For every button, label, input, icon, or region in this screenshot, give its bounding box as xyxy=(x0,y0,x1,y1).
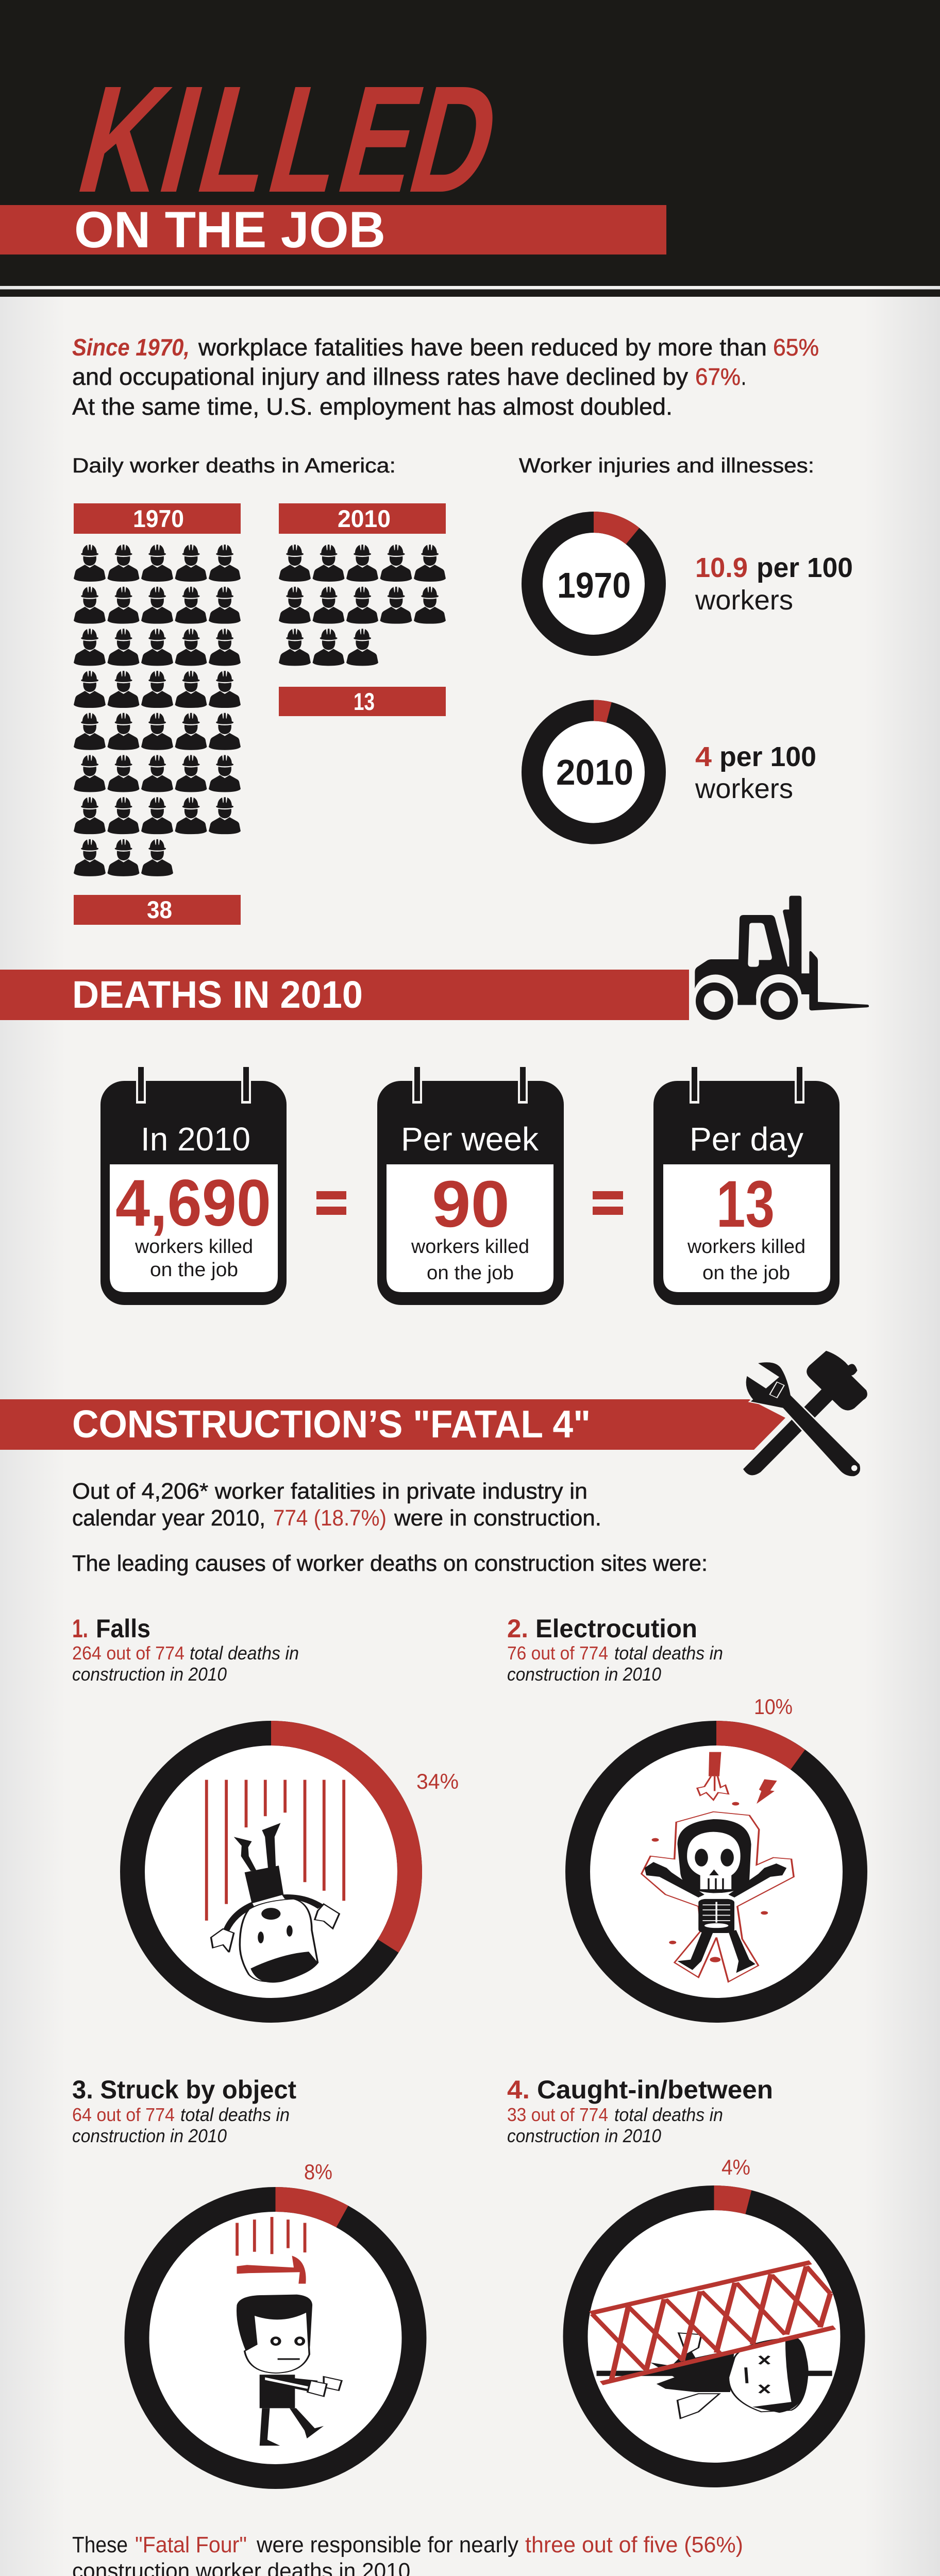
section banner: construction's fatal 4 xyxy=(0,1399,785,1450)
percentage: 34% xyxy=(416,1769,459,1793)
intro paragraph: . xyxy=(741,363,746,390)
percentage: 8% xyxy=(304,2160,332,2184)
subtext xyxy=(507,1642,723,1685)
heading: daily worker deaths: Daily worker deaths in America: xyxy=(72,454,396,477)
donut: 1970 injuries: 1970 xyxy=(557,565,631,605)
subtext: total deaths in xyxy=(614,2104,723,2125)
heading: Falls xyxy=(96,1614,150,1643)
paragraph: fatal four share: These xyxy=(72,2532,128,2557)
intro paragraph: Since 1970, xyxy=(72,334,190,361)
panel: falls xyxy=(72,1614,459,2010)
heading: 1. xyxy=(72,1614,88,1643)
illustration: worker under ladder xyxy=(591,2262,834,2418)
donut: 34% xyxy=(132,1721,422,2010)
heading: 2. xyxy=(507,1614,528,1643)
paragraph: fatal four share xyxy=(72,2532,743,2576)
illustration: electrocuted skeleton xyxy=(642,1752,794,1982)
subtext: 76 out of 774 xyxy=(507,1642,608,1664)
icon: forklift xyxy=(695,896,869,1016)
intro paragraph: 65% xyxy=(773,334,819,361)
calendar: per day: Per day xyxy=(690,1121,803,1158)
calendar: in 2010: 4,690 xyxy=(115,1166,271,1240)
paragraph: construction share: were in construction. xyxy=(394,1505,601,1531)
label bar: 2010 xyxy=(279,503,446,534)
donut: 1970 injuries xyxy=(532,512,656,645)
illustration: falling worker xyxy=(205,1780,345,1982)
total bar: 38 xyxy=(74,895,241,925)
donut: 2010 injuries xyxy=(532,700,656,834)
stat: 4 per 100: workers xyxy=(695,773,793,804)
subtext: construction in 2010 xyxy=(72,2125,227,2146)
donut: 4% xyxy=(575,2185,852,2475)
label bar: 2010: 2010 xyxy=(338,505,391,532)
subtext: total deaths in xyxy=(190,1642,299,1664)
subtext xyxy=(72,1642,299,1685)
calendar: per week: workers killed xyxy=(411,1236,529,1258)
paragraph: construction share xyxy=(72,1479,601,1531)
1970 deaths pictogram xyxy=(74,503,241,925)
donut: 10% xyxy=(578,1721,855,2010)
2010 deaths pictogram xyxy=(279,503,446,716)
subtext: 264 out of 774 xyxy=(72,1642,184,1664)
header band xyxy=(0,0,940,297)
text: leading causes intro: The leading causes of worker deaths on construction sites were: xyxy=(72,1551,708,1576)
stat: 10.9 per 100: workers xyxy=(695,585,793,616)
paragraph: fatal four share: "Fatal Four" xyxy=(135,2532,247,2557)
heading: worker injuries: Worker injuries and illnesses: xyxy=(519,454,814,477)
calendar: per day: workers killed xyxy=(687,1236,805,1258)
intro paragraph: and occupational injury and illness rates have declined by xyxy=(72,363,688,390)
label bar: 1970: 1970 xyxy=(133,505,184,532)
subtext: total deaths in xyxy=(180,2104,290,2125)
stat: 4 per 100: 4 xyxy=(695,741,712,772)
total bar: 38: 38 xyxy=(147,896,172,923)
stat: 4 per 100 xyxy=(695,741,816,804)
panel: electrocution xyxy=(507,1614,855,2010)
icon: crossed wrench and hammer xyxy=(742,1351,867,1477)
subtext xyxy=(72,2104,290,2146)
worker icons: 38 xyxy=(74,545,241,876)
section banner: deaths in 2010: DEATHS IN 2010 xyxy=(72,973,363,1016)
calendar: per day: on the job xyxy=(702,1262,790,1284)
donut: 2010 injuries: 2010 xyxy=(556,752,633,792)
illustration: worker struck by hammer xyxy=(236,2217,342,2446)
heading: 4. xyxy=(507,2075,530,2104)
section banner: construction's fatal 4: CONSTRUCTION’S "FATAL 4" xyxy=(72,1402,591,1446)
calendar: in 2010: workers killed xyxy=(135,1236,253,1258)
intro paragraph: At the same time, U.S. employment has almost doubled. xyxy=(72,393,673,420)
title bar: on the job xyxy=(0,201,666,258)
total bar: 13 xyxy=(279,687,446,716)
paragraph: fatal four share: three out of five (56%) xyxy=(525,2532,743,2557)
calendar: in 2010: In 2010 xyxy=(141,1121,250,1158)
intro paragraph: 67% xyxy=(695,363,741,390)
stat: 10.9 per 100 xyxy=(695,552,853,616)
donut: 8% xyxy=(137,2187,414,2477)
panel: struck by object xyxy=(72,2075,414,2477)
calendar: per day xyxy=(653,1066,840,1305)
section banner: deaths in 2010 xyxy=(0,970,689,1020)
stat: 10.9 per 100: per 100 xyxy=(757,552,853,583)
equals sign xyxy=(316,1191,346,1215)
paragraph: fatal four share: were responsible for nearly xyxy=(256,2532,518,2557)
paragraph: construction share: 774 (18.7%) xyxy=(273,1505,387,1531)
stat: 4 per 100: per 100 xyxy=(719,741,816,772)
equals sign xyxy=(593,1191,623,1215)
subtext: construction in 2010 xyxy=(507,2125,661,2146)
stat: 10.9 per 100: 10.9 xyxy=(695,552,748,583)
calendar: in 2010: on the job xyxy=(150,1259,238,1281)
calendar: per week xyxy=(377,1066,564,1305)
paragraph: construction share: calendar year 2010, xyxy=(72,1505,265,1531)
subtext: 64 out of 774 xyxy=(72,2104,175,2125)
intro paragraph: workplace fatalities have been reduced by more than xyxy=(198,334,767,361)
paragraph: construction share: Out of 4,206* worker fatalities in private industry in xyxy=(72,1479,588,1504)
heading: 3. Struck by object xyxy=(72,2075,296,2104)
worker icons: 13 xyxy=(279,545,446,666)
heading: Caught-in/between xyxy=(537,2075,773,2104)
heading: Electrocution xyxy=(535,1614,697,1643)
intro paragraph xyxy=(72,334,819,420)
calendar: in 2010 xyxy=(100,1066,287,1305)
calendar: per day: 13 xyxy=(716,1167,775,1241)
calendar: per week: Per week xyxy=(401,1121,539,1158)
title bar: on the job: ON THE JOB xyxy=(74,201,385,258)
percentage: 4% xyxy=(721,2155,750,2179)
subtext: construction in 2010 xyxy=(72,1664,227,1685)
calendar: per week: on the job xyxy=(427,1262,514,1284)
title: KILLED: KILLED xyxy=(64,55,515,224)
calendar: per week: 90 xyxy=(432,1167,510,1241)
subtext: total deaths in xyxy=(614,1642,723,1664)
subtext xyxy=(507,2104,723,2146)
subtext: 33 out of 774 xyxy=(507,2104,608,2125)
panel: caught-in/between xyxy=(507,2075,852,2475)
total bar: 13: 13 xyxy=(354,688,375,715)
label bar: 1970 xyxy=(74,503,241,534)
percentage: 10% xyxy=(754,1694,793,1719)
subtext: construction in 2010 xyxy=(507,1664,661,1685)
